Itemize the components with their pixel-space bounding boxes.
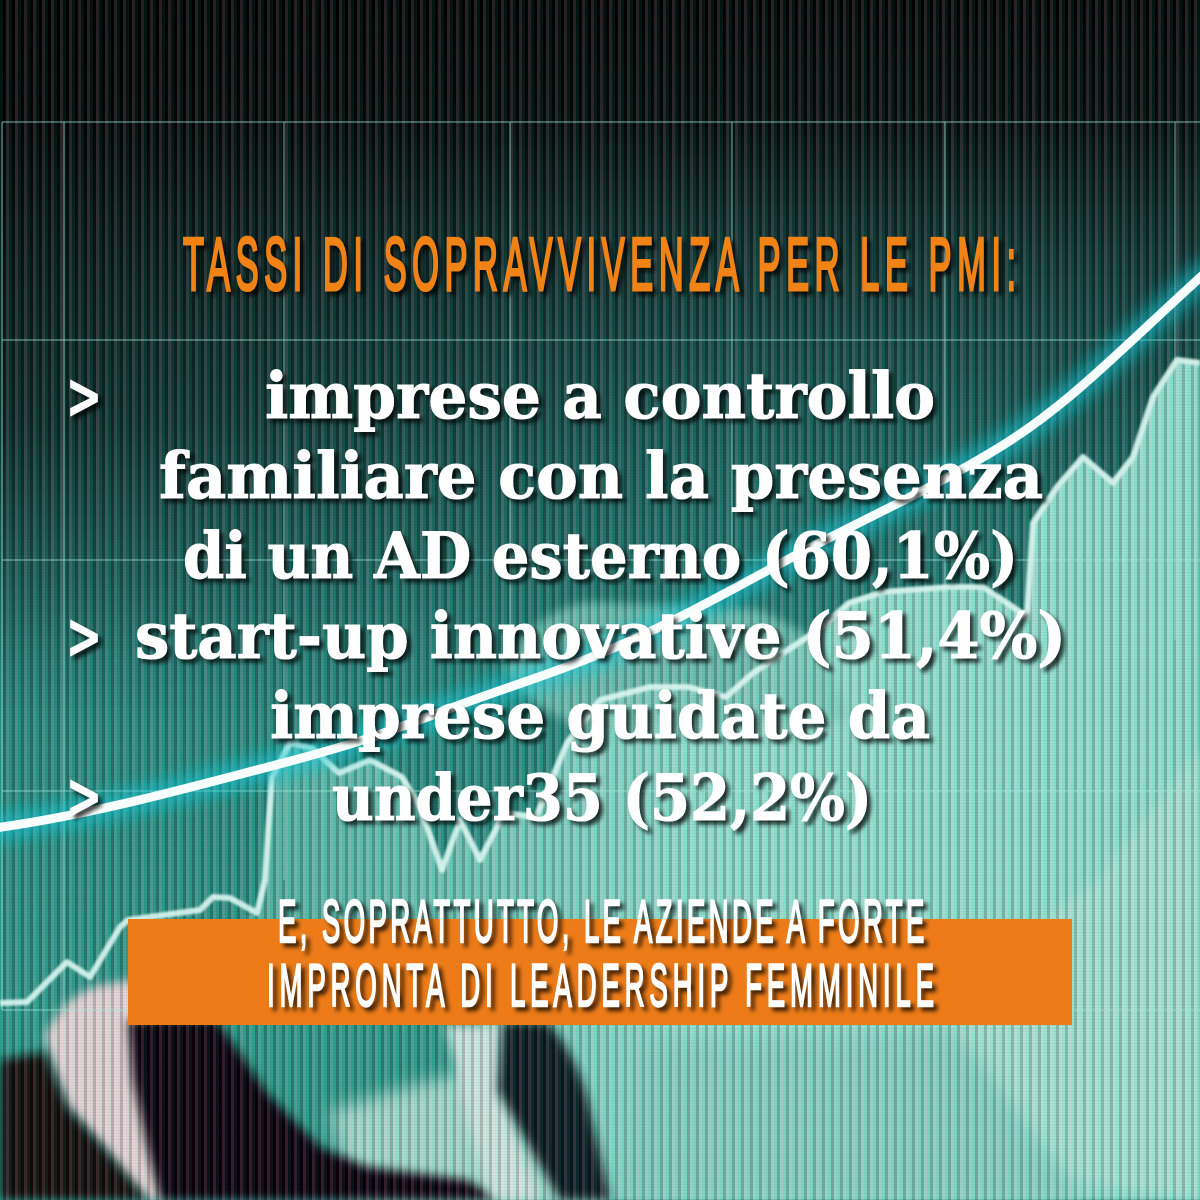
item 3 line 2: under35 (52,2%) — [332, 761, 872, 836]
item 1 line 2: familiare con la presenza — [159, 439, 1043, 514]
chart: area outline line — [0, 360, 1200, 1003]
callout text — [267, 888, 934, 1019]
callout text: E, SOPRATTUTTO, LE AZIENDE A FORTE — [278, 888, 924, 955]
item 1 line 3: di un AD esterno (60,1%) — [183, 519, 1018, 594]
bullet 2: > — [66, 599, 102, 674]
title: TASSI DI SOPRAVVIVENZA PER LE PMI: — [183, 223, 1016, 307]
item 2: start-up innovative (51,4%) — [135, 599, 1066, 674]
item 1 line 1: imprese a controllo — [265, 359, 935, 434]
orange callout band — [128, 919, 1072, 1025]
chart: rising main trend line — [0, 273, 1200, 828]
background: mint area chart — [245, 360, 1200, 1200]
bullet 3: > — [66, 759, 102, 834]
bullet 1: > — [66, 359, 102, 434]
callout text: IMPRONTA DI LEADERSHIP FEMMINILE — [267, 952, 934, 1019]
item 3 line 1: imprese guidate da — [270, 679, 930, 754]
background: hand and fingers — [0, 980, 610, 1200]
list of survival rates — [66, 359, 1066, 836]
